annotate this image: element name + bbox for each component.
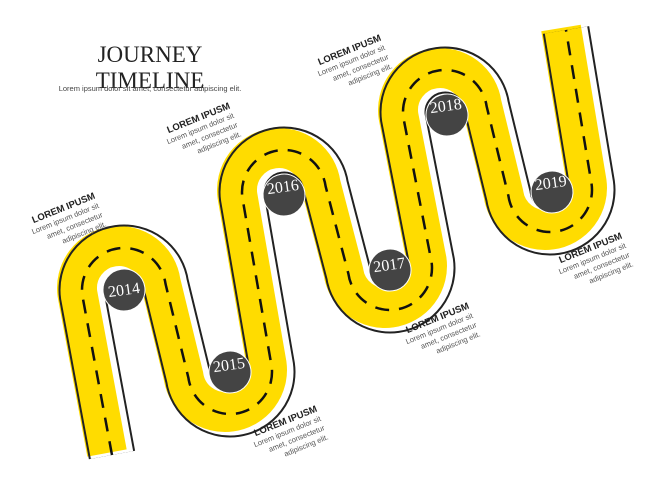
road outline xyxy=(58,26,616,460)
text block 2014: LOREM IPUSM xyxy=(31,191,97,226)
2018: 2018 xyxy=(429,96,463,117)
text block 2019: Lorem ipsum dolor sit xyxy=(557,241,627,276)
text block 2019 xyxy=(557,231,635,285)
text block 2014 xyxy=(30,191,108,245)
2018 xyxy=(423,91,471,139)
text block 2016: LOREM IPUSM xyxy=(166,101,232,136)
title xyxy=(96,42,204,93)
2019 xyxy=(528,168,576,216)
text block 2015: LOREM IPUSM xyxy=(253,404,319,439)
text block 2014: adipiscing elit. xyxy=(61,220,108,245)
text block 2017: adipiscing elit. xyxy=(435,330,482,355)
text block 2015 xyxy=(252,404,330,458)
title: JOURNEY xyxy=(98,42,202,67)
2014 xyxy=(100,266,148,314)
road yellow xyxy=(77,28,587,453)
2016 xyxy=(260,171,308,219)
2015: 2015 xyxy=(212,355,246,376)
text block 2018: amet, consectetur xyxy=(331,52,390,83)
milestone circles xyxy=(100,91,576,396)
text block 2014: amet, consectetur xyxy=(45,210,104,241)
2014: 2014 xyxy=(107,280,141,301)
title: TIMELINE xyxy=(96,68,204,93)
2015 xyxy=(206,348,254,396)
text block 2017: amet, consectetur xyxy=(419,320,478,351)
text block 2014: Lorem ipsum dolor sit xyxy=(30,201,100,236)
text block 2018: adipiscing elit. xyxy=(347,62,394,87)
2016: 2016 xyxy=(266,177,300,198)
text block 2016: amet, consectetur xyxy=(180,120,239,151)
text block 2019: LOREM IPUSM xyxy=(558,231,624,266)
2017: 2017 xyxy=(372,255,406,276)
text block 2018: Lorem ipsum dolor sit xyxy=(316,43,386,78)
text block 2017 xyxy=(404,301,482,355)
text block 2015: Lorem ipsum dolor sit xyxy=(252,414,322,449)
text block 2018: LOREM IPUSM xyxy=(317,33,383,68)
text block 2015: amet, consectetur xyxy=(267,423,326,454)
center dashes xyxy=(82,30,592,455)
road chart xyxy=(57,24,616,460)
text block 2016: Lorem ipsum dolor sit xyxy=(165,111,235,146)
text block 2015: adipiscing elit. xyxy=(283,433,330,458)
text block 2019: amet, consectetur xyxy=(572,250,631,281)
text block 2018 xyxy=(316,33,394,87)
text block 2017: LOREM IPUSM xyxy=(405,301,471,336)
text block 2016 xyxy=(165,101,243,155)
text block 2019: adipiscing elit. xyxy=(588,260,635,285)
2019: 2019 xyxy=(534,173,568,194)
subtitle: Lorem ipsum dolor sit amet, consectetur adipiscing elit. xyxy=(59,84,241,93)
text block 2016: adipiscing elit. xyxy=(196,130,243,155)
2017 xyxy=(366,246,414,294)
text block 2017: Lorem ipsum dolor sit xyxy=(404,311,474,346)
